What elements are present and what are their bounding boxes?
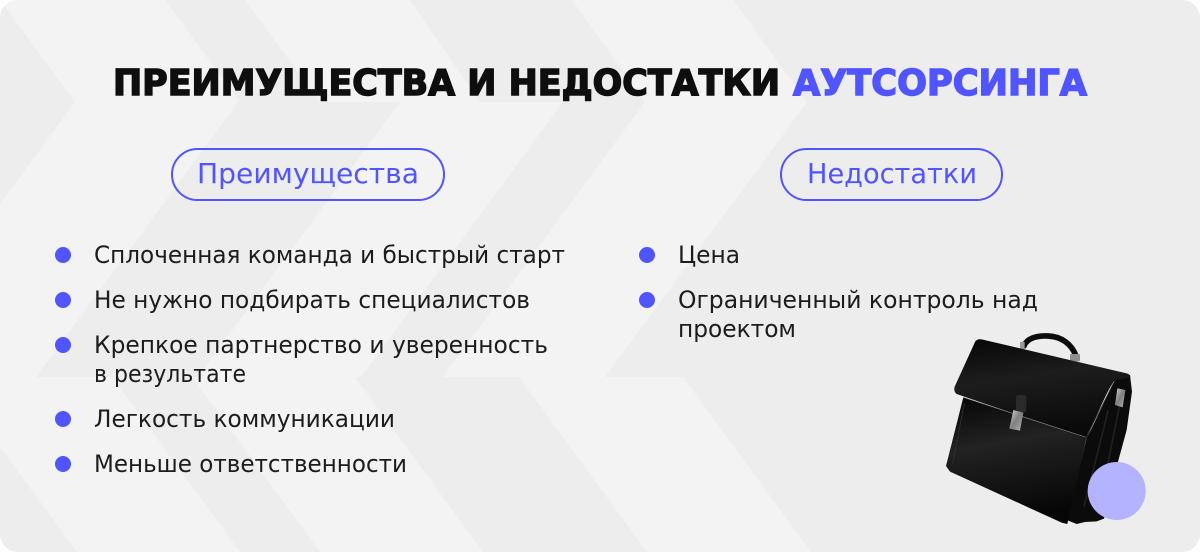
item: limited control: Ограниченный контроль над xyxy=(678,286,1038,314)
item: limited control xyxy=(639,286,1038,343)
front panel xyxy=(946,397,1087,524)
item: strong partnership xyxy=(55,331,548,388)
side buckle xyxy=(1115,388,1125,407)
panel: advantages heading pill: Преимущества xyxy=(197,158,419,190)
item: easy communication: Легкость коммуникации xyxy=(94,405,395,433)
title: АУТСОРСИНГА xyxy=(793,63,1088,104)
accent circle xyxy=(1088,462,1146,520)
item: price: Цена xyxy=(678,241,740,269)
panel: disadvantages heading pill xyxy=(781,149,1002,200)
item: price xyxy=(639,241,740,269)
item: strong partnership: Крепкое партнерство и уверенность xyxy=(94,331,548,359)
clasp xyxy=(1009,395,1026,431)
title xyxy=(113,63,1088,104)
list: disadvantages xyxy=(639,241,1038,343)
item: strong partnership: в результате xyxy=(94,360,246,388)
list: advantages xyxy=(55,241,565,478)
item: cohesive team: Сплоченная команда и быстрый старт xyxy=(94,241,565,269)
icon: black briefcase xyxy=(946,336,1132,524)
panel: disadvantages heading pill: Недостатки xyxy=(807,158,977,190)
item: less responsibility: Меньше ответственности xyxy=(94,450,407,478)
item: limited control: проектом xyxy=(678,315,796,343)
panel: advantages heading pill xyxy=(172,149,444,200)
flap xyxy=(954,339,1130,439)
handle xyxy=(1020,336,1080,361)
item: no need to hire: Не нужно подбирать специалистов xyxy=(94,286,530,314)
title: ПРЕИМУЩЕСТВА И НЕДОСТАТКИ xyxy=(113,63,780,104)
side gusset xyxy=(1067,375,1132,524)
